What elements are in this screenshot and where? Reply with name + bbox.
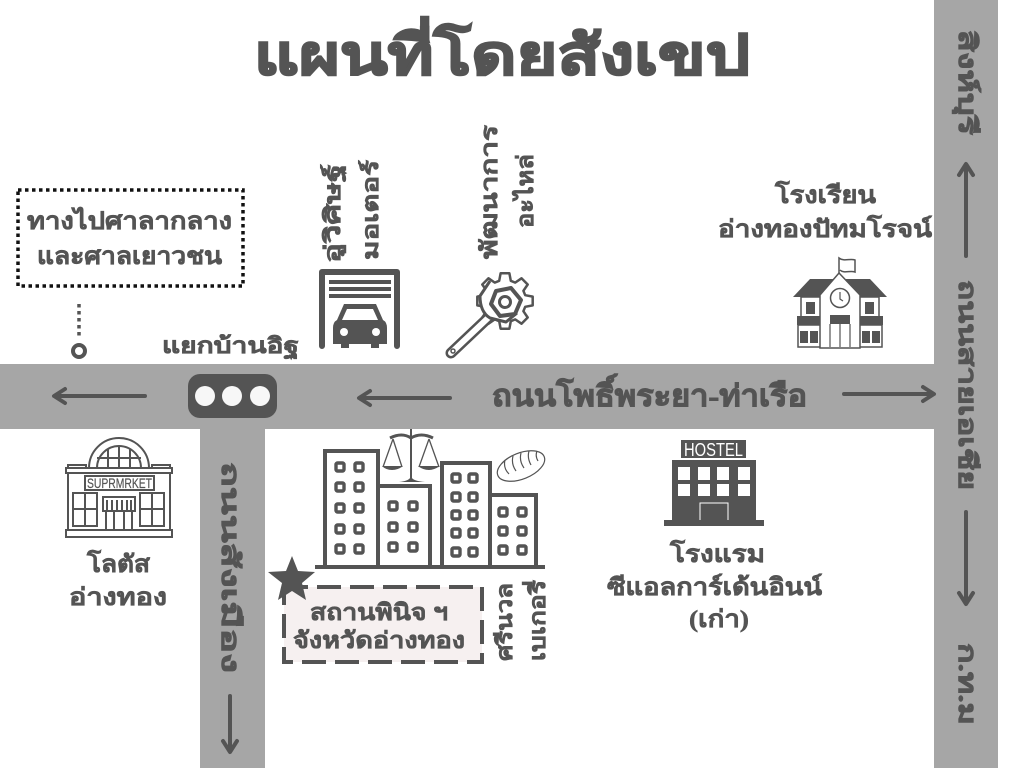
label: hotel: โรงแรม — [669, 539, 765, 568]
icon: supermarket: SUPRMRKET — [87, 476, 152, 491]
label: bakery: ศรีนวล — [492, 583, 517, 661]
label: hotel — [607, 539, 823, 633]
callout: way to provincial hall — [18, 190, 243, 286]
icon: garage with car — [322, 272, 397, 348]
label: spare parts: อะไหล่ — [511, 154, 538, 228]
label: school — [718, 180, 933, 243]
title: แผนที่โดยสังเขป — [254, 16, 750, 86]
label: garage: มอเตอร์ — [358, 160, 383, 260]
road name: horizontal: ถนนโพธิ์พระยา-ท่าเรือ — [492, 373, 807, 413]
label: garage: อู่วิศิษฐ์ — [320, 164, 347, 263]
icon: supermarket — [66, 438, 172, 537]
road name: Singburi: สิงห์บุรี — [951, 30, 982, 136]
panel: juvenile observation centre: จังหวัดอ่างทอง — [293, 628, 465, 653]
arrow: south lower road — [223, 696, 237, 752]
callout: way to provincial hall: ทางไปศาลากลาง — [27, 206, 232, 235]
callout: way to provincial hall: และศาลเยาวชน — [37, 244, 223, 270]
label: hotel: ซีแอลการ์เด้นอินน์ — [607, 573, 823, 601]
dotted pointer to road — [73, 304, 85, 357]
label: bakery — [492, 580, 550, 661]
label: Lotus — [69, 549, 167, 611]
icon: hostel: HOSTEL — [684, 440, 743, 460]
icon: hostel — [664, 440, 764, 526]
icon: star — [268, 556, 315, 600]
label: intersection: แยกบ้านอิฐ — [162, 333, 299, 360]
label: school: อ่างทองปัทมโรจน์ — [718, 214, 933, 243]
road name: Asia: ถนนสายเอเชีย — [953, 280, 981, 490]
arrow: west — [54, 389, 145, 403]
label: hotel: (เก่า) — [689, 607, 749, 633]
road name: Bangkok: ก.ท.ม — [953, 643, 980, 725]
label: bakery: เบเกอรี่ — [521, 580, 550, 661]
label: Lotus: โลตัส — [86, 549, 150, 578]
panel: juvenile observation centre: สถานพินิจ ฯ — [310, 600, 448, 625]
label: spare parts — [477, 124, 538, 259]
arrow: east — [844, 387, 934, 401]
icon: traffic light — [188, 374, 277, 418]
label: Lotus: อ่างทอง — [69, 585, 167, 611]
label: spare parts: พัฒนาการ — [477, 124, 502, 259]
icon: wrench and gear — [451, 273, 533, 353]
road name: vertical lower road: ถนนสังเมือง — [216, 462, 244, 673]
arrow: west 2 — [359, 391, 450, 405]
icon: city buildings — [315, 451, 545, 569]
label: school: โรงเรียน — [774, 180, 877, 209]
label: garage — [320, 160, 383, 263]
icon: school — [793, 258, 887, 348]
panel: juvenile observation centre — [284, 587, 482, 662]
arrow: south — [959, 512, 973, 604]
arrow: north — [959, 164, 973, 256]
windows — [336, 463, 526, 556]
icon: scales of justice — [382, 429, 440, 482]
icon: bread — [493, 445, 549, 487]
